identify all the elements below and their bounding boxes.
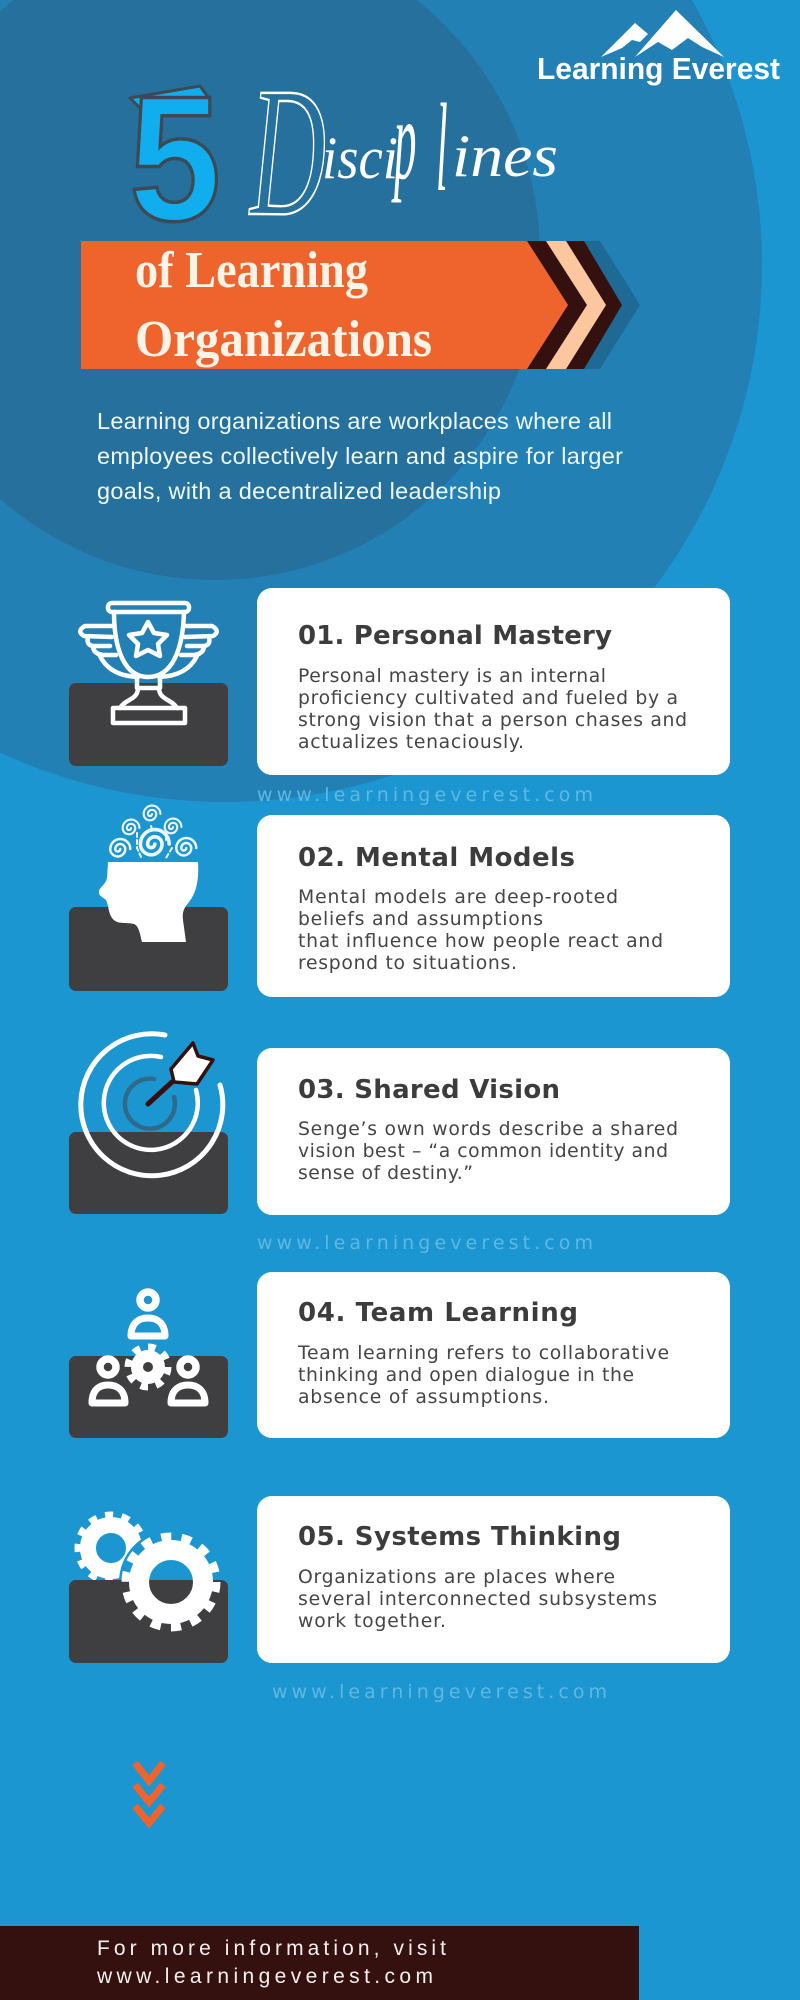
footer bar: www.learningeverest.com xyxy=(96,1965,433,1988)
card 4: Team Learning xyxy=(257,1272,730,1438)
card 2: Mental Models: 02. Mental Models xyxy=(298,843,575,873)
card 2: Mental Models: that influence how people react and xyxy=(298,931,663,952)
icon: gears xyxy=(69,1515,228,1663)
intro paragraph xyxy=(97,408,623,504)
icon: head with swirls xyxy=(69,806,228,991)
card 1: Personal Mastery: 01. Personal Mastery xyxy=(298,621,612,651)
card 5: Systems Thinking xyxy=(257,1496,730,1663)
title word Disciplines: isci xyxy=(322,125,398,191)
title word Disciplines: p xyxy=(391,77,416,203)
icon: target with dart xyxy=(69,1034,228,1214)
subtitle banner xyxy=(81,241,640,369)
title word Disciplines: ines xyxy=(452,123,558,189)
card 4: Team Learning: Team learning refers to collaborative xyxy=(297,1343,669,1364)
card 1: Personal Mastery: strong vision that a person chases and xyxy=(298,710,687,731)
intro paragraph: employees collectively learn and aspire for larger xyxy=(97,443,623,469)
watermark 1: www.learningeverest.com xyxy=(257,784,593,806)
icon: team with gear xyxy=(69,1292,228,1438)
card 2: Mental Models xyxy=(257,815,730,997)
card 1: Personal Mastery: proficiency cultivated and fueled by a xyxy=(298,688,678,709)
card 3: Shared Vision: vision best – “a common identity and xyxy=(298,1141,668,1162)
card 5: Systems Thinking: 05. Systems Thinking xyxy=(298,1522,621,1552)
card 5: Systems Thinking: Organizations are places where xyxy=(298,1567,615,1588)
card 1: Personal Mastery: actualizes tenaciously. xyxy=(298,732,524,753)
subtitle banner: of Learning xyxy=(135,242,368,299)
card 3: Shared Vision: Senge’s own words describe a shared xyxy=(298,1119,678,1140)
card 4: Team Learning: absence of assumptions. xyxy=(298,1387,549,1408)
card 3: Shared Vision xyxy=(257,1048,730,1215)
title word Disciplines: l xyxy=(436,79,448,218)
intro paragraph: Learning organizations are workplaces where all xyxy=(97,408,612,434)
card 2: Mental Models: respond to situations. xyxy=(298,953,517,974)
card 4: Team Learning: thinking and open dialogue in the xyxy=(298,1365,634,1386)
watermark 3: www.learningeverest.com xyxy=(272,1681,607,1703)
logo: Learning Everest xyxy=(537,10,780,86)
title number 5: 5 xyxy=(129,59,221,258)
card 3: Shared Vision: sense of destiny.” xyxy=(298,1163,473,1184)
card 2: Mental Models: Mental models are deep-rooted xyxy=(298,887,618,908)
footer bar: For more information, visit xyxy=(97,1937,446,1960)
card 1: Personal Mastery: Personal mastery is an internal xyxy=(298,666,606,687)
subtitle banner: Organizations xyxy=(135,311,432,368)
footer bar xyxy=(0,1926,639,2000)
watermark 2: www.learningeverest.com xyxy=(257,1232,593,1254)
card 2: Mental Models: beliefs and assumptions xyxy=(298,909,543,930)
title word Disciplines xyxy=(248,50,558,255)
icon: trophy xyxy=(69,603,228,766)
logo: Learning Everest: Learning Everest xyxy=(537,51,780,86)
card 4: Team Learning: 04. Team Learning xyxy=(298,1298,578,1328)
arrows: down chevrons xyxy=(135,1763,163,1823)
card 5: Systems Thinking: several interconnected subsystems xyxy=(298,1589,657,1610)
card 3: Shared Vision: 03. Shared Vision xyxy=(298,1075,560,1105)
card 1: Personal Mastery xyxy=(257,588,730,775)
card 5: Systems Thinking: work together. xyxy=(298,1611,446,1632)
title word Disciplines: D xyxy=(248,50,326,255)
intro paragraph: goals, with a decentralized leadership xyxy=(97,478,501,504)
